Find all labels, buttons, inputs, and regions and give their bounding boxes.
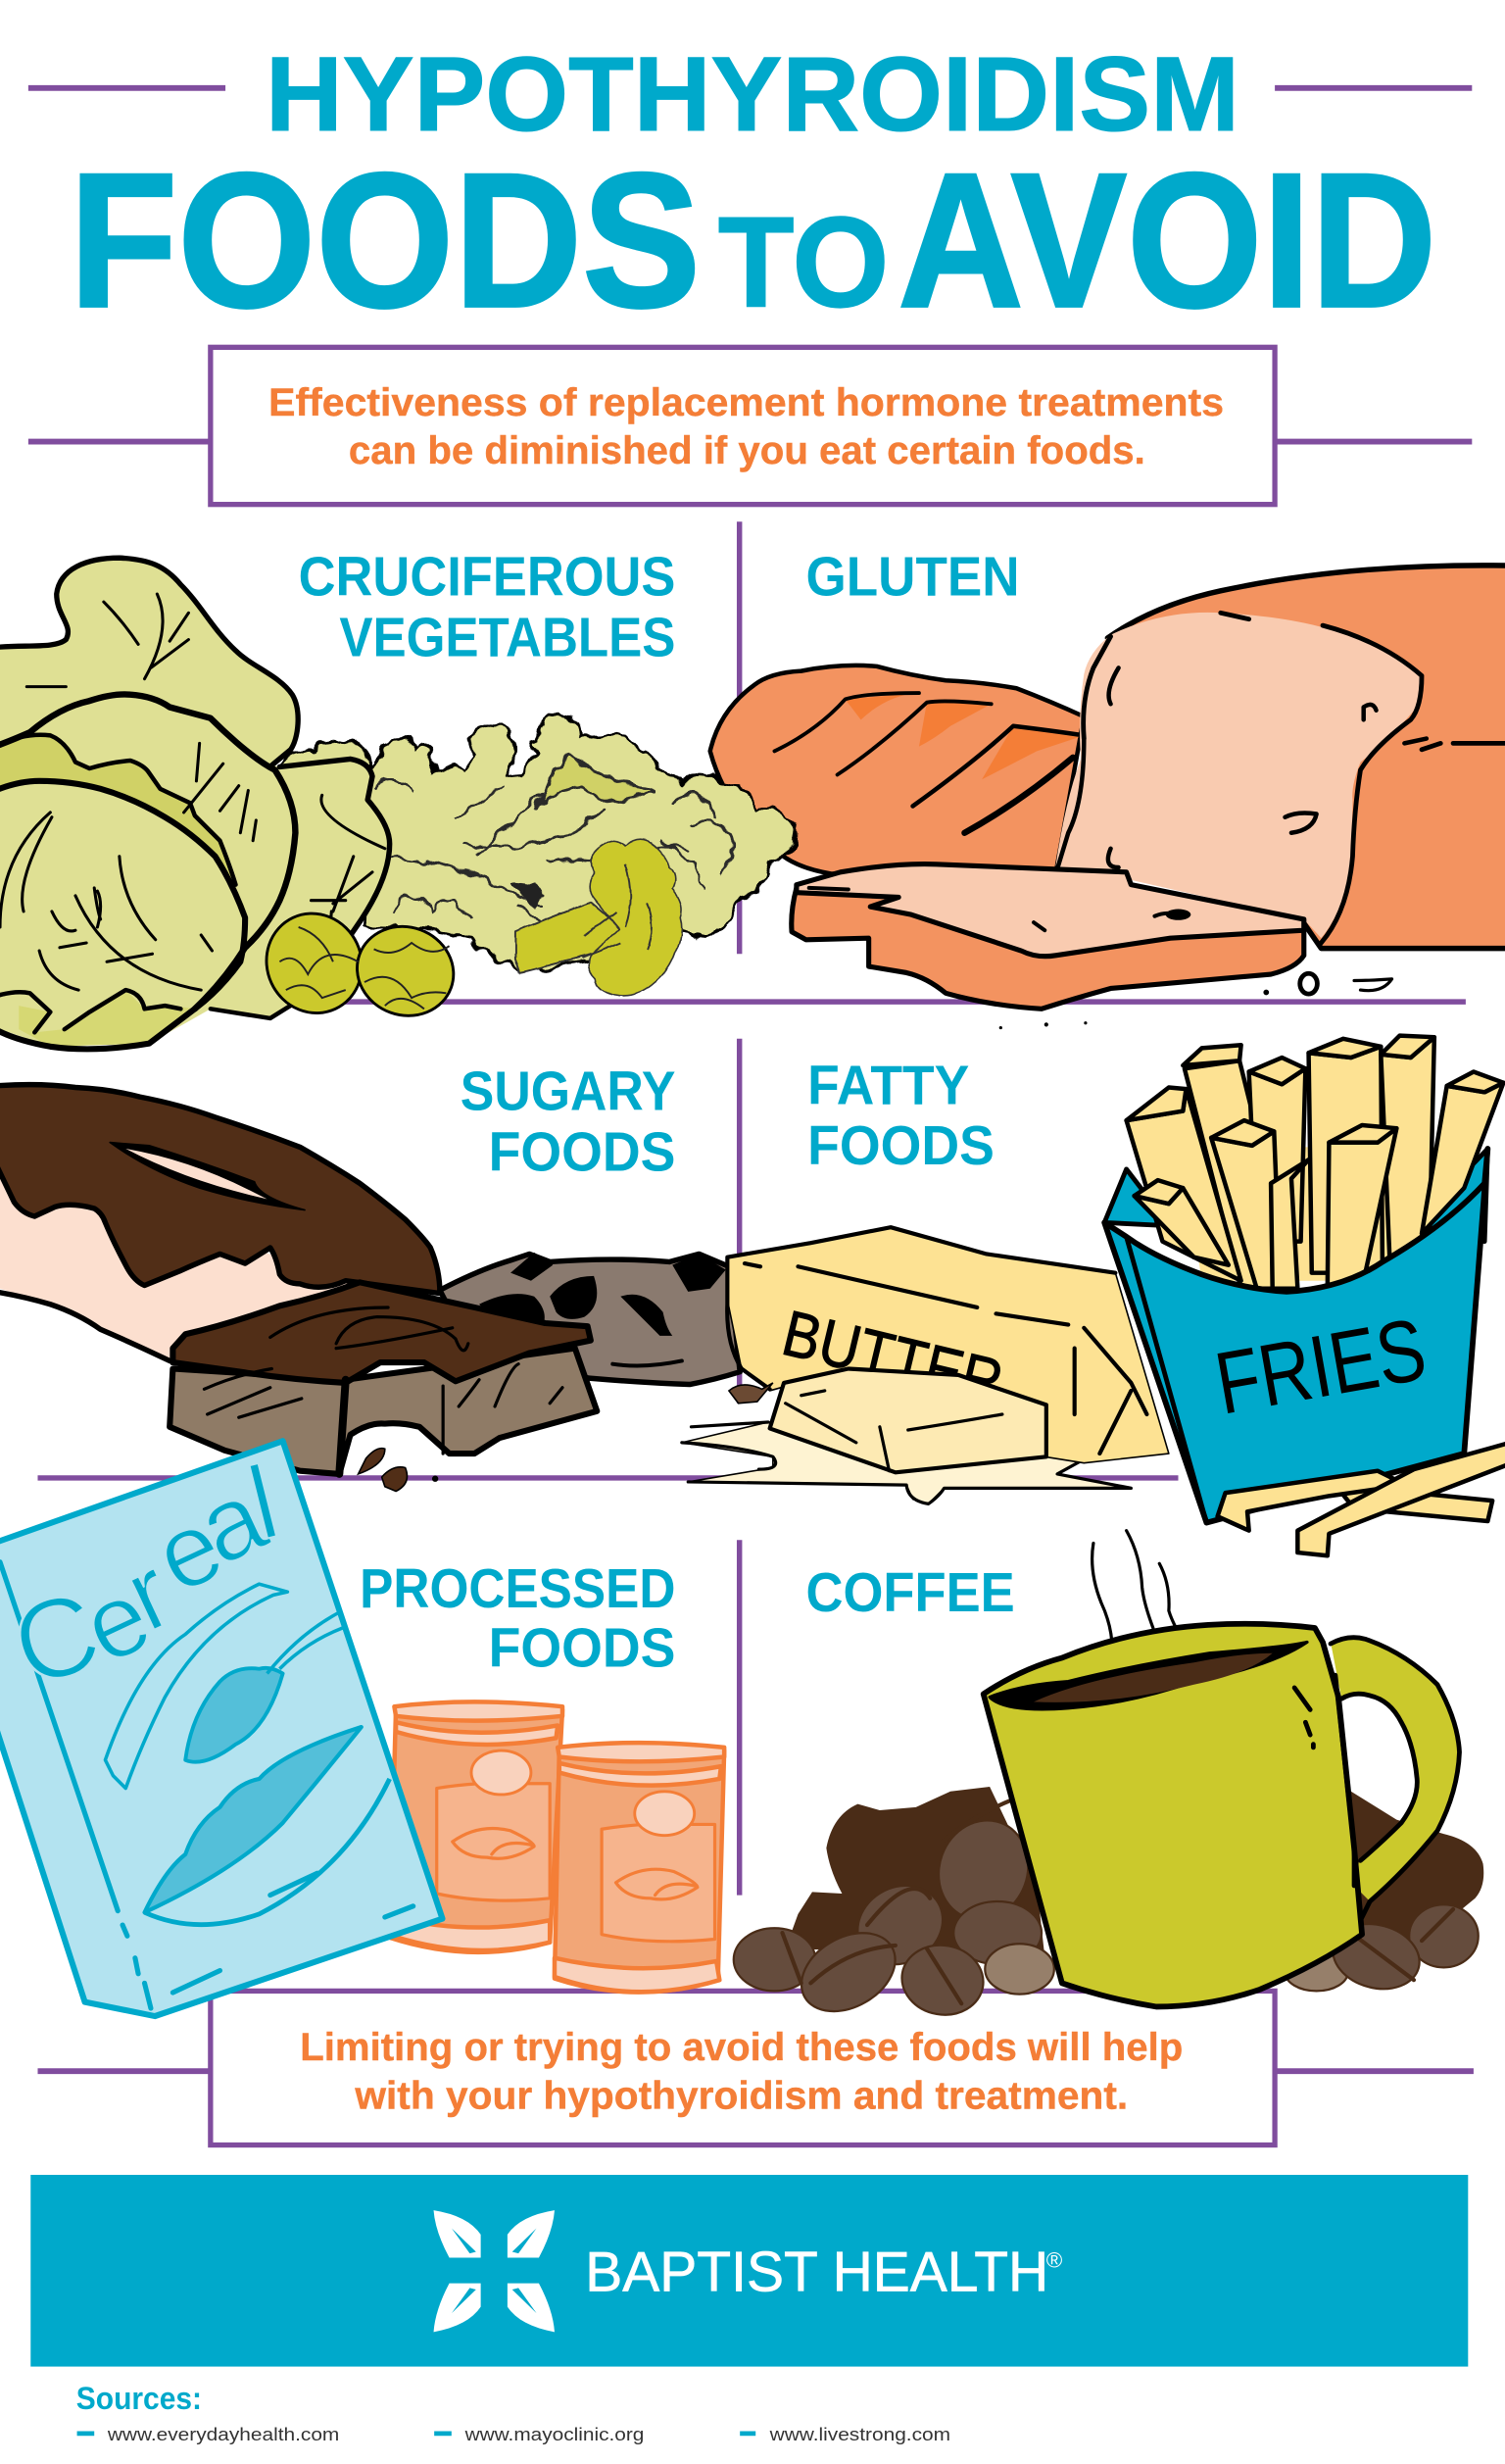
heading: processed foods: FOODS — [489, 1616, 675, 1679]
illustration: canned food — [390, 1701, 724, 1993]
sources — [76, 2381, 950, 2444]
can 1 — [390, 1701, 562, 1952]
intro callout — [28, 347, 1472, 505]
illustration: kale — [279, 714, 797, 971]
melted butter — [682, 1422, 1131, 1503]
heading: cruciferous vegetables: VEGETABLES — [339, 606, 675, 668]
heading: cruciferous vegetables: CRUCIFEROUS — [299, 546, 675, 609]
illustration: brussels sprouts — [250, 898, 466, 1029]
baguette — [710, 665, 1084, 873]
icon: logo petals — [434, 2210, 555, 2332]
title: FOODS — [70, 134, 701, 348]
loose fries — [1218, 1441, 1505, 1555]
butter pat — [770, 1368, 1046, 1472]
illustration: brownie — [170, 1282, 597, 1492]
heading: processed foods — [360, 1557, 675, 1679]
fries box back — [1104, 1149, 1487, 1257]
illustration: cookie — [440, 1253, 740, 1385]
illustration: cereal box: e — [138, 1486, 239, 1615]
title: HYPOTHYROIDISM — [266, 35, 1239, 153]
closing callout — [37, 1991, 1474, 2145]
illustration: cereal box: r — [109, 1534, 188, 1653]
sources: www.mayoclinic.org — [463, 2424, 644, 2444]
heading: sugary foods: FOODS — [489, 1120, 675, 1183]
illustration: broccoli — [515, 839, 682, 996]
heading: fatty foods — [807, 1054, 995, 1177]
butter stick — [727, 1227, 1169, 1463]
illustration: cereal box — [0, 1441, 443, 2016]
closing callout: Limiting or trying to avoid these foods will help — [300, 2026, 1183, 2069]
sources: www.livestrong.com — [769, 2424, 950, 2444]
logo band: ® — [1046, 2248, 1063, 2273]
fallen slice — [792, 888, 1304, 1009]
illustration: bread — [710, 566, 1505, 1029]
illustration: cabbage — [0, 558, 390, 1049]
illustration: cereal box: C — [0, 1567, 114, 1711]
title — [28, 35, 1472, 348]
heading: cruciferous vegetables — [299, 546, 675, 668]
heading: sugary foods — [461, 1060, 675, 1183]
crumbs — [1300, 973, 1317, 994]
title: TO — [718, 190, 889, 334]
steam — [1092, 1531, 1189, 1650]
heading: processed foods: PROCESSED — [360, 1557, 675, 1620]
heading: coffee: COFFEE — [806, 1561, 1015, 1624]
heading: gluten: GLUTEN — [806, 546, 1020, 609]
illustration: cereal box: e — [66, 1557, 167, 1686]
illustration: donut — [0, 1085, 440, 1360]
can 2 — [555, 1743, 724, 1993]
illustration: cereal box: l — [238, 1444, 289, 1562]
logo band — [30, 2175, 1468, 2367]
heading: fatty foods: FOODS — [807, 1114, 995, 1177]
illustration: fries: FRIES — [1208, 1301, 1432, 1434]
sources: Sources: — [76, 2381, 202, 2416]
bread loaf — [1107, 566, 1505, 949]
title: AVOID — [898, 134, 1436, 348]
bread slice — [1055, 613, 1420, 938]
illustration: coffee beans — [734, 1787, 1483, 2027]
illustration: butter — [682, 1227, 1169, 1503]
illustration: butter: BUTTER — [776, 1296, 1010, 1418]
heading: fatty foods: FATTY — [807, 1054, 969, 1116]
intro callout: can be diminished if you eat certain foods. — [349, 429, 1145, 472]
illustration: coffee mug — [984, 1531, 1459, 2006]
closing callout: with your hypothyroidism and treatment. — [354, 2075, 1128, 2118]
illustration: cereal box: a — [180, 1457, 282, 1587]
illustration: fries — [1104, 1036, 1505, 1555]
heading: sugary foods: SUGARY — [461, 1060, 675, 1123]
fries box front — [1104, 1149, 1487, 1523]
sources: www.everydayhealth.com — [107, 2424, 339, 2444]
intro callout: Effectiveness of replacement hormone treatments — [268, 381, 1224, 424]
logo band: BAPTIST HEALTH — [585, 2242, 1048, 2304]
mug handle — [1331, 1637, 1459, 1901]
mug body — [984, 1624, 1362, 2006]
